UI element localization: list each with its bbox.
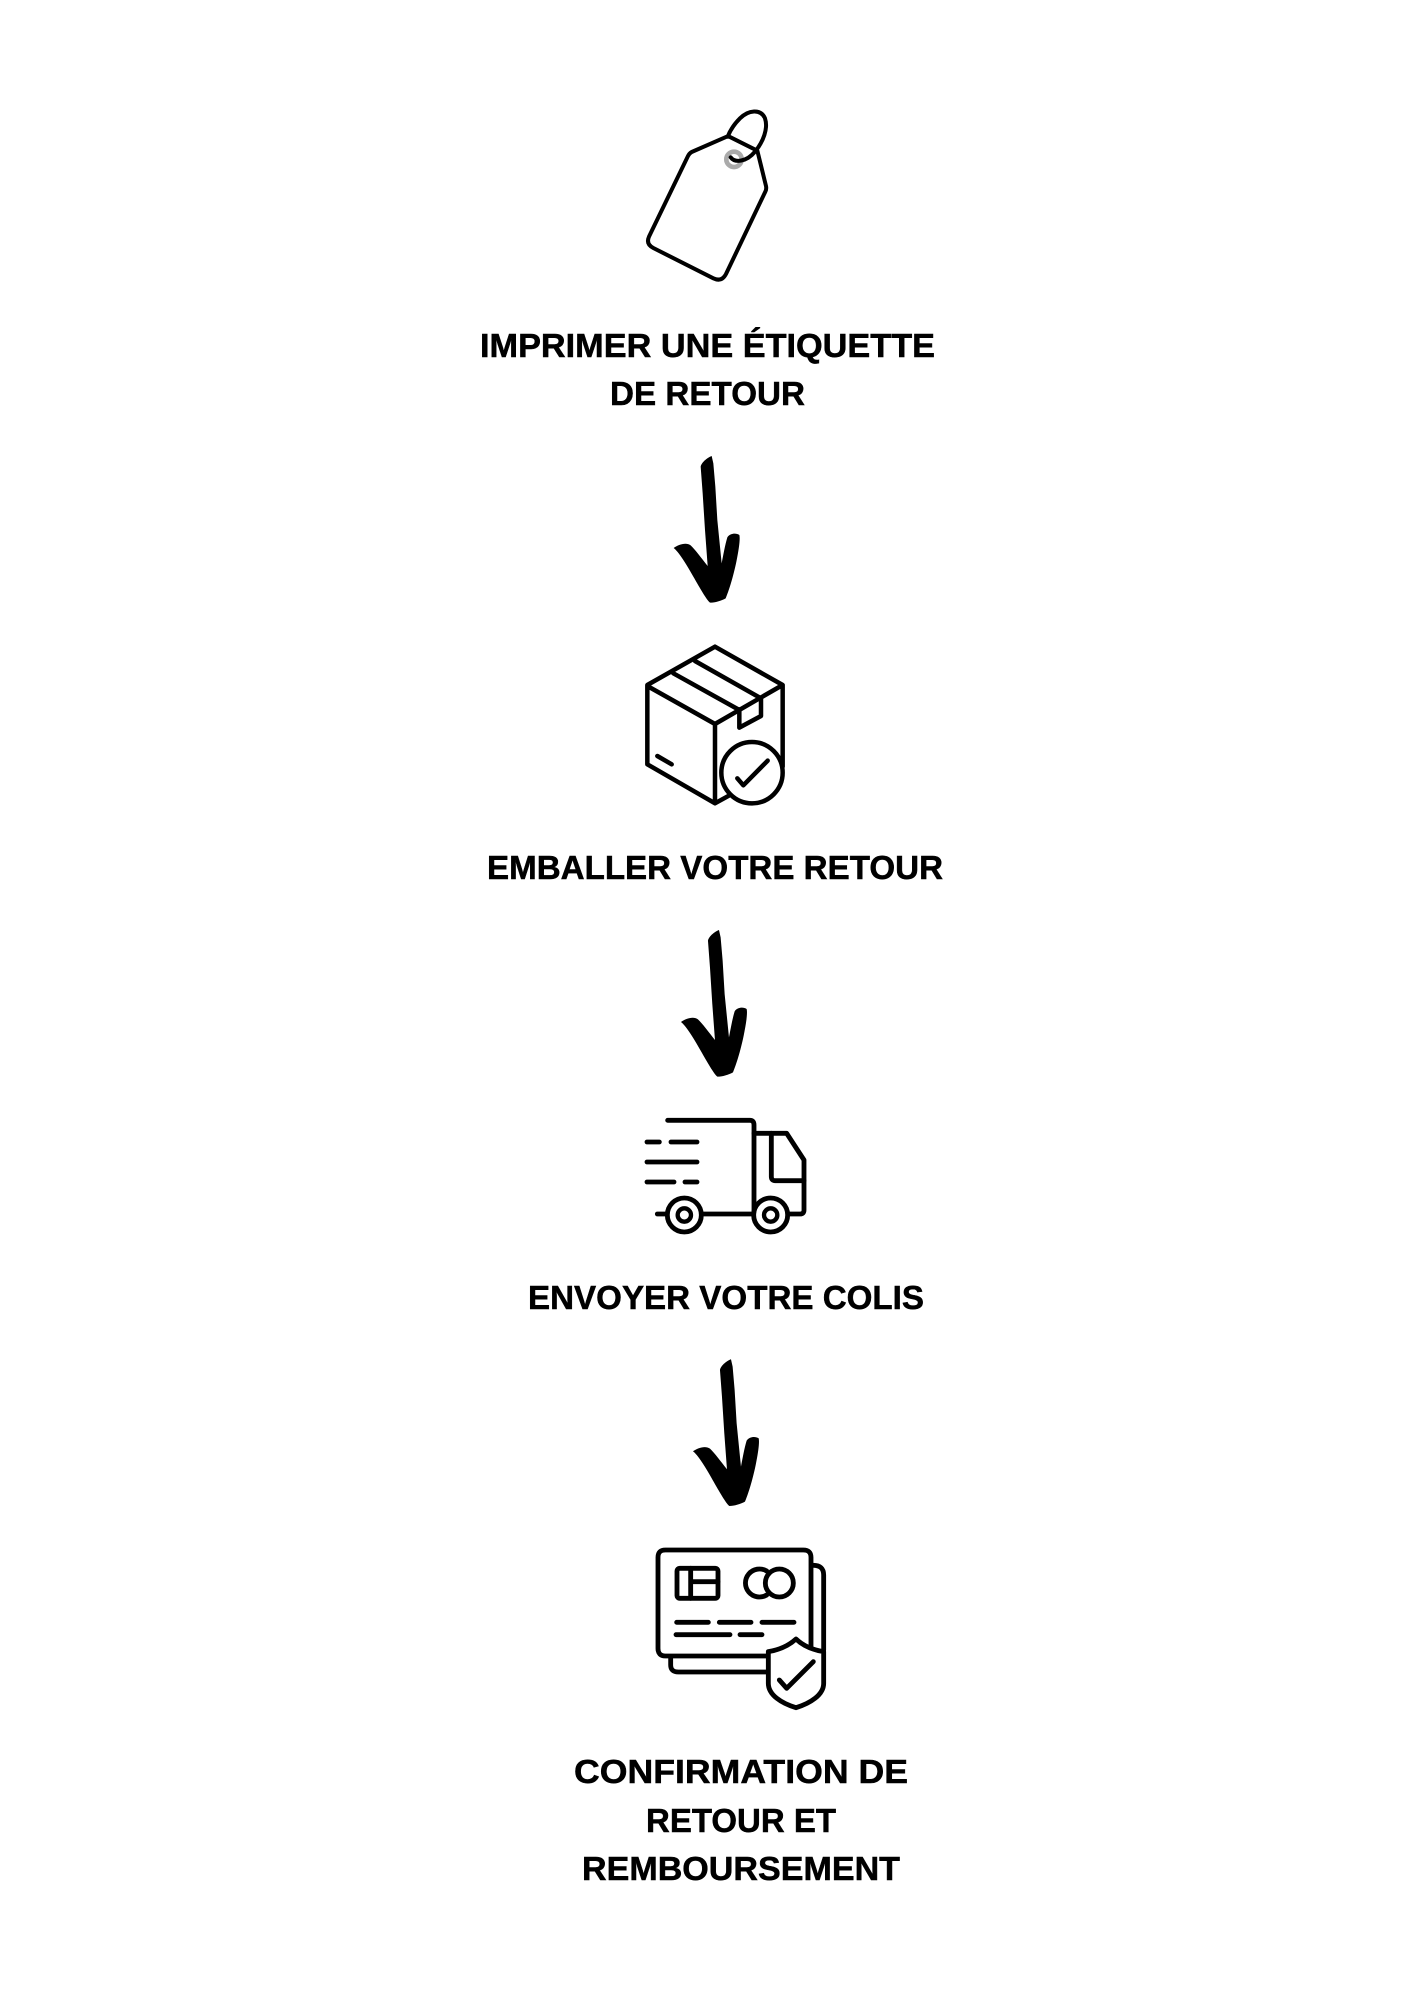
arrow 1 <box>674 456 740 603</box>
icon: delivery truck <box>647 1120 804 1232</box>
step 4 label: CONFIRMATION DE <box>574 1754 908 1791</box>
step 4 label: RETOUR ET <box>646 1803 837 1840</box>
icon: credit card with shield <box>658 1550 824 1708</box>
step 1 label: DE RETOUR <box>610 376 805 413</box>
step 3 label: ENVOYER VOTRE COLIS <box>528 1280 924 1317</box>
arrow 2 <box>681 930 747 1077</box>
step 1 label <box>480 327 935 413</box>
step 4 label <box>574 1754 908 1888</box>
step 2 label: EMBALLER VOTRE RETOUR <box>487 850 943 887</box>
icon: parcel box with check <box>647 647 783 803</box>
icon: price tag <box>648 111 766 280</box>
step 4 label: REMBOURSEMENT <box>582 1851 901 1888</box>
step 1 label: IMPRIMER UNE ÉTIQUETTE <box>480 327 935 365</box>
arrow 3 <box>693 1359 759 1506</box>
